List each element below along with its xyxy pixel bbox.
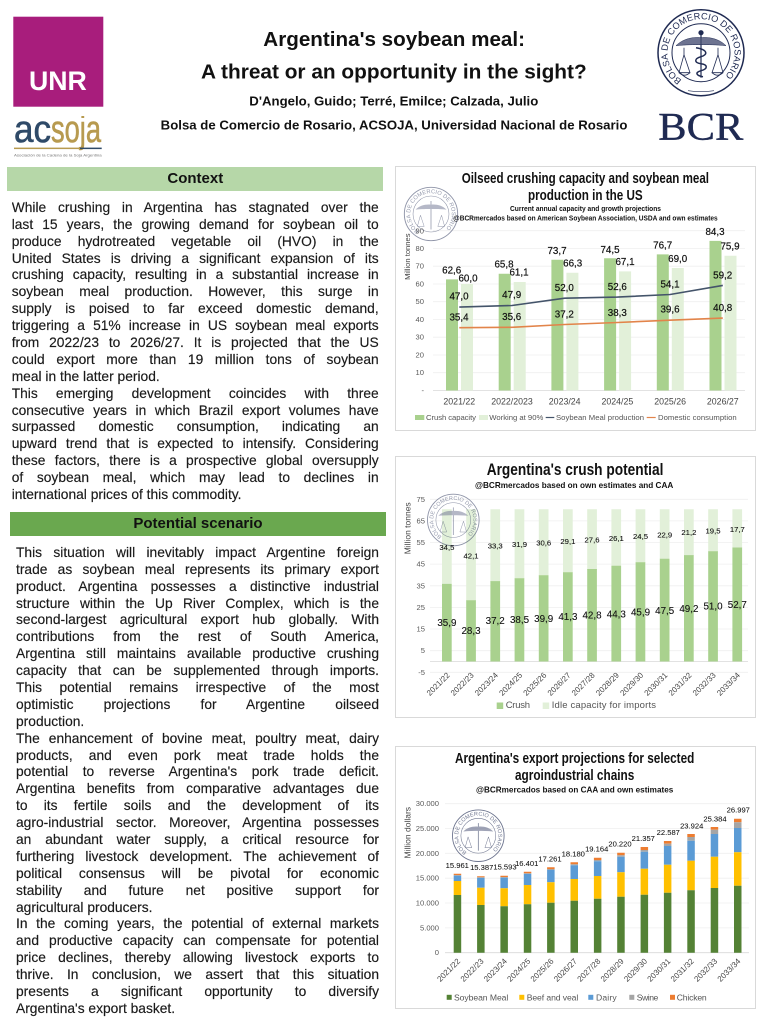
- idle capacity labels: 31,9: [512, 540, 527, 549]
- stacked bars: dairy: [454, 828, 742, 888]
- text: context paragraphs: these factors, there is a prospective global oversupply: [12, 453, 379, 468]
- grid lines and y axis: Million dollars: [403, 807, 413, 858]
- crush labels: 49,2: [679, 604, 698, 615]
- text: potential scenario paragraphs: Argentina benefits from comparative advantages due: [16, 781, 379, 796]
- bars: crush capacity: [446, 241, 722, 390]
- grid lines and y axis: 30: [416, 333, 424, 342]
- legend: Swine: [637, 992, 659, 1002]
- legend: [447, 992, 707, 1002]
- x axis labels: 2027/28: [576, 956, 603, 984]
- legend: Dairy: [596, 992, 617, 1002]
- text: potential scenario paragraphs: production.: [16, 714, 84, 729]
- x axis labels: 2023/24: [473, 670, 500, 698]
- total labels: 26.997: [727, 806, 750, 814]
- text: context paragraphs: [12, 200, 379, 502]
- chart title: @BCRmercados based on CAA and own estimates: [476, 785, 674, 795]
- x axis labels: 2023/24: [549, 397, 581, 407]
- data labels: 69,0: [668, 254, 688, 265]
- text: context paragraphs: meal in the latter period.: [12, 369, 160, 384]
- x axis labels: 2024/25: [601, 397, 633, 407]
- text: context paragraphs: soybean meal production. However, this surge in: [12, 284, 379, 299]
- x axis labels: 2025/26: [654, 397, 686, 407]
- text: potential scenario paragraphs: an abundant water supply, a critical resource for: [16, 832, 379, 847]
- stacked bars: soybean meal: [454, 886, 742, 953]
- legend: Crush: [506, 700, 530, 711]
- crush labels: 41,3: [558, 612, 578, 623]
- data labels: 61,1: [509, 268, 529, 278]
- grid lines and y axis: 30.000: [416, 799, 439, 808]
- text: potential scenario paragraphs: stability and future net positive support for: [16, 883, 379, 898]
- x axis labels: [435, 956, 743, 984]
- idle capacity labels: 22,9: [657, 530, 672, 540]
- affiliations: Bolsa de Comercio de Rosario, ACSOJA, Universidad Nacional de Rosario: [161, 118, 627, 132]
- title and authors: [161, 29, 627, 132]
- crush labels: 44,3: [607, 610, 626, 620]
- text: context paragraphs: surpassed domestic consumption, indicating an: [12, 419, 379, 434]
- idle capacity labels: 26,1: [609, 534, 624, 543]
- text: potential scenario paragraphs: capacity that can be supplemented through imports.: [16, 663, 379, 678]
- stacked bars: chicken: [454, 819, 742, 877]
- chart title: Argentina's crush potential: [487, 461, 663, 479]
- x axis labels: 2028/29: [594, 670, 621, 698]
- text: potential scenario paragraphs: furthering livestock development. The achievement of: [16, 849, 379, 864]
- grid lines and y axis: 55: [417, 538, 425, 547]
- x axis labels: 2021/22: [443, 397, 475, 407]
- text: potential scenario paragraphs: agro-industrial sector. Moreover, Argentina possesses: [16, 815, 379, 830]
- data labels: 66,3: [563, 258, 583, 270]
- x axis labels: 2031/32: [669, 956, 696, 984]
- logo: ACSOJA: [14, 116, 103, 158]
- text: context paragraphs: last 15 years, the growing demand for soybean oil to: [12, 217, 379, 232]
- bars: idle capacity for imports: [442, 509, 742, 601]
- x axis labels: 2024/25: [505, 956, 533, 984]
- grid lines and y axis: -5: [418, 668, 425, 677]
- text: context paragraphs: supply is poised to far exceed domestic demand,: [12, 301, 379, 316]
- x axis labels: 2032/33: [691, 670, 718, 698]
- x axis labels: 2025/26: [529, 956, 556, 984]
- chart title: [453, 170, 718, 222]
- grid lines and y axis: 25.000: [416, 824, 439, 833]
- text: potential scenario paragraphs: price declines, thereby allowing livestock exports to: [16, 950, 379, 965]
- line: soybean meal production: [459, 285, 723, 307]
- text: potential scenario paragraphs: agricultural producers.: [16, 900, 153, 915]
- text: context paragraphs: United States is driving a significant expansion of its: [12, 251, 379, 266]
- logo: UNR: UNR: [29, 66, 87, 96]
- main title line 2: A threat or an opportunity in the sight?: [201, 61, 587, 83]
- x axis labels: 2029/30: [618, 670, 646, 698]
- data labels: 35,4: [449, 312, 469, 324]
- watermark seal: BOLSA DE COMERCIO DE ROSARIO: [430, 496, 478, 539]
- total labels: 15.593: [493, 862, 517, 872]
- chart title: agroindustrial chains: [515, 767, 634, 784]
- data labels: 54,1: [660, 280, 680, 290]
- grid lines and y axis: Million tonnes: [403, 502, 413, 554]
- logo: Bolsa de Comercio de Rosario seal and BCR: [657, 9, 745, 148]
- data labels: 62,6: [442, 266, 462, 276]
- crush labels: 42,8: [582, 610, 602, 622]
- line: domestic consumption: [459, 318, 723, 328]
- x axis labels: 2022/2023: [491, 397, 533, 407]
- data labels: 35,6: [502, 312, 522, 323]
- grid lines and y axis: 45: [417, 560, 425, 569]
- total labels: 20.220: [608, 840, 632, 848]
- chart: Argentina's crush potential: [395, 456, 756, 718]
- logo: Bolsa de Comercio de Rosario seal and BCR: BCR: [658, 106, 743, 148]
- logo: UNR: [13, 16, 104, 107]
- total labels: 15.961: [446, 861, 469, 870]
- text: context paragraphs: consecutive years in which Brazil export volumes have: [12, 403, 379, 418]
- data labels: 67,1: [615, 257, 635, 268]
- text: potential scenario paragraphs: Argentina still maintains available productive crushing: [16, 646, 379, 661]
- stacked bars: swine: [454, 822, 742, 878]
- heading: Potential scenario: Potential scenario: [133, 515, 263, 532]
- data labels: 52,0: [555, 283, 574, 294]
- text: potential scenario paragraphs: political consensus will be pivotal for economic: [16, 866, 379, 881]
- text: potential scenario paragraphs: trade as soybean meal represents its primary export: [16, 562, 379, 577]
- x axis labels: 2030/31: [643, 670, 670, 698]
- grid lines and y axis: -: [421, 386, 424, 395]
- grid lines and y axis: 50: [416, 297, 424, 306]
- chart title: Current annual capacity and growth projections: [510, 204, 661, 213]
- grid lines and y axis: 5: [421, 646, 425, 655]
- total labels: 18.180: [562, 850, 585, 858]
- chart title: @BCRmercados based on own estimates and CAA: [475, 480, 673, 490]
- data labels: 76,7: [653, 240, 672, 252]
- grid lines and y axis: 0: [435, 948, 439, 957]
- data labels: 40,8: [713, 303, 733, 314]
- idle capacity labels: 24,5: [633, 532, 648, 541]
- legend: Soybean Meal: [454, 992, 508, 1002]
- text: potential scenario paragraphs: thrive. In conclusion, we assert that this situation: [16, 967, 379, 982]
- stacked bars: beef and veal: [454, 852, 742, 906]
- idle capacity labels: 34,5: [439, 543, 454, 552]
- idle capacity labels: 17,7: [730, 525, 745, 534]
- grid lines and y axis: 75: [417, 495, 425, 504]
- x axis labels: 2021/22: [425, 670, 452, 698]
- logo: ACSOJA: Asociación de la Cadena de la Soja Argentina: [14, 152, 103, 158]
- legend: Soybean Meal production: [556, 413, 644, 422]
- x axis labels: 2027/28: [570, 670, 597, 698]
- crush labels: 39,9: [534, 614, 553, 625]
- text: potential scenario paragraphs: to its fertile soils and the development of its: [16, 798, 379, 813]
- text: context paragraphs: from 2022/23 to 2026/27. It is projected that the US: [12, 335, 379, 350]
- text: potential scenario paragraphs: [16, 545, 379, 1016]
- watermark seal: BOLSA DE COMERCIO DE ROSARIO: [454, 812, 502, 855]
- chart title: @BCRmercados based on American Soybean Association, USDA and own estimates: [453, 214, 718, 222]
- x axis labels: 2028/29: [599, 956, 626, 984]
- grid lines and y axis: 20: [416, 350, 424, 360]
- legend: Working at 90%: [489, 413, 543, 422]
- heading: Context: Context: [167, 170, 223, 187]
- grid lines and y axis: 15: [417, 624, 425, 634]
- grid lines and y axis: 35: [417, 581, 425, 590]
- grid lines and y axis: 15.000: [416, 874, 439, 883]
- grid lines and y axis: [403, 226, 745, 395]
- total labels: 15.387: [470, 863, 493, 872]
- legend: Crush capacity: [426, 413, 476, 422]
- grid lines and y axis: 70: [416, 262, 424, 271]
- authors: D'Angelo, Guido; Terré, Emilce; Calzada, Julio: [249, 94, 538, 108]
- crush labels: 35,9: [437, 618, 456, 629]
- text: context paragraphs: triggering a 51% increase in US soybean meal exports: [12, 318, 379, 333]
- grid lines and y axis: 10: [416, 368, 424, 377]
- idle capacity labels: [439, 525, 745, 560]
- x axis labels: 2030/31: [646, 956, 673, 984]
- x axis labels: 2026/27: [707, 397, 739, 407]
- crush labels: 51,0: [703, 602, 723, 612]
- data labels: 38,3: [608, 308, 627, 319]
- text: potential scenario paragraphs: In the coming years, the potential of external markets: [16, 916, 379, 931]
- text: context paragraphs: produce hydrotreated vegetable oil (HVO) in the: [12, 234, 379, 249]
- text: potential scenario paragraphs: optimistic projections for Argentine oilseed: [16, 697, 379, 712]
- crush labels: 38,5: [510, 615, 530, 626]
- x axis labels: 2029/30: [622, 956, 649, 984]
- x axis labels: 2024/25: [497, 670, 525, 698]
- x axis labels: 2025/26: [522, 670, 549, 698]
- grid lines and y axis: [403, 799, 749, 957]
- crush labels: 28,3: [461, 626, 481, 637]
- data labels: 60,0: [458, 274, 478, 284]
- data labels: 52,6: [608, 282, 627, 293]
- legend: Idle capacity for imports: [552, 700, 656, 711]
- grid lines and y axis: 20.000: [416, 849, 439, 858]
- grid lines and y axis: 80: [416, 244, 424, 253]
- total labels: 23.924: [680, 822, 703, 830]
- text: potential scenario paragraphs: second-largest agricultural export hub globally. With: [16, 612, 379, 627]
- grid lines and y axis: 40: [416, 315, 424, 324]
- text: potential scenario paragraphs: presents a significant opportunity to diversify: [16, 984, 379, 999]
- total labels: [446, 806, 750, 872]
- x axis labels: 2026/27: [546, 670, 573, 698]
- legend: [497, 700, 656, 711]
- x axis labels: 2023/24: [482, 956, 509, 984]
- legend: [415, 413, 737, 422]
- text: context paragraphs: While crushing in Argentina has stagnated over the: [12, 200, 379, 215]
- idle capacity labels: 33,3: [488, 542, 503, 550]
- text: potential scenario paragraphs: Argentina's export basket.: [16, 1001, 175, 1016]
- text: potential scenario paragraphs: contributions from the rest of South America,: [16, 629, 379, 644]
- text: context paragraphs: This emerging development coincides with three: [12, 386, 379, 401]
- x axis labels: 2022/23: [449, 670, 476, 698]
- data labels: 37,2: [555, 310, 574, 320]
- total labels: 17.261: [538, 854, 562, 864]
- x axis labels: 2031/32: [667, 670, 694, 698]
- watermark seal: BOLSA DE COMERCIO DE ROSARIO: [406, 189, 456, 234]
- legend: Beef and veal: [527, 992, 578, 1002]
- data labels: 47,9: [502, 290, 521, 301]
- grid lines and y axis: [403, 495, 748, 677]
- x axis labels: 2022/23: [459, 956, 486, 984]
- crush labels: 47,5: [655, 606, 675, 617]
- crush labels: 52,7: [728, 600, 747, 611]
- data labels: 47,0: [449, 292, 469, 302]
- data labels: 39,6: [660, 304, 680, 316]
- x axis labels: 2021/22: [435, 956, 463, 984]
- legend: Domestic consumption: [658, 413, 737, 422]
- text: context paragraphs: upward trend that is expected to intensify. Considering: [12, 436, 379, 451]
- grid lines and y axis: 10.000: [416, 898, 439, 908]
- chart: oilseed crushing capacity and soybean meal production in the US: [395, 166, 756, 431]
- bars: working at 90%: [461, 256, 736, 390]
- x axis labels: 2033/34: [715, 670, 742, 698]
- data labels: [442, 227, 740, 324]
- data labels: 65,8: [494, 260, 514, 270]
- data labels: 59,2: [713, 270, 732, 282]
- x axis labels: [425, 670, 742, 698]
- heading: Context: [7, 167, 383, 191]
- text: context paragraphs: international prices of this commodity.: [12, 487, 241, 502]
- chart title: [455, 750, 694, 795]
- text: potential scenario paragraphs: This potential remains irrespective of the most: [16, 680, 379, 695]
- chart title: production in the US: [528, 187, 643, 204]
- total labels: 22.587: [657, 828, 680, 837]
- text: context paragraphs: crushing capacity, resulting in a substantial increase in: [12, 267, 379, 282]
- text: potential scenario paragraphs: products, and even pork meat trade holds the: [16, 748, 379, 763]
- grid lines and y axis: 65: [417, 516, 425, 525]
- text: potential scenario paragraphs: This situation will inevitably impact Argentine foreign: [16, 545, 379, 560]
- idle capacity labels: 19,5: [706, 526, 720, 536]
- idle capacity labels: 29,1: [560, 537, 575, 546]
- chart title: [475, 461, 673, 490]
- heading: Potential scenario: [10, 512, 386, 536]
- text: context paragraphs: could export more than 19 million tons of soybean: [12, 352, 379, 367]
- crush labels: 45,9: [631, 608, 650, 618]
- text: potential scenario paragraphs: potential to reverse Argentina's pork trade deficit.: [16, 764, 379, 779]
- x axis labels: 2026/27: [552, 956, 579, 984]
- idle capacity labels: 27,6: [585, 536, 599, 544]
- text: potential scenario paragraphs: The enhancement of bovine meat, poultry meat, dairy: [16, 731, 379, 746]
- data labels: 84,3: [705, 227, 725, 238]
- total labels: 21.357: [632, 834, 655, 843]
- grid lines and y axis: Million tonnes: [403, 233, 412, 280]
- x axis labels: 2033/34: [716, 956, 743, 984]
- text: potential scenario paragraphs: structure within the Up River Complex, which is the: [16, 596, 379, 611]
- data labels: 75,9: [720, 242, 740, 252]
- grid lines and y axis: 5.000: [420, 923, 439, 932]
- x axis labels: [443, 397, 739, 407]
- legend: Chicken: [677, 992, 707, 1002]
- chart: Argentina's export projections for selected agroindustrial chains: [395, 746, 756, 1009]
- crush labels: 37,2: [486, 616, 505, 627]
- crush labels: [437, 600, 747, 637]
- total labels: 19.164: [585, 844, 608, 854]
- bars: crush: [442, 548, 742, 662]
- text: potential scenario paragraphs: and productive capacity can compensate for potential: [16, 933, 379, 948]
- idle capacity labels: 30,6: [536, 538, 551, 548]
- grid lines and y axis: 25: [417, 603, 425, 612]
- idle capacity labels: 21,2: [681, 528, 696, 537]
- main title line 1: Argentina's soybean meal:: [263, 29, 525, 51]
- data labels: 73,7: [547, 246, 567, 257]
- logo: Bolsa de Comercio de Rosario seal and BCR: BOLSA DE COMERCIO DE ROSARIO: [661, 12, 741, 85]
- grid lines and y axis: 60: [416, 280, 424, 288]
- chart title: Argentina's export projections for selected: [455, 750, 694, 767]
- grid lines and y axis: 90: [416, 226, 424, 236]
- data labels: 74,5: [600, 245, 620, 256]
- text: potential scenario paragraphs: product. Argentina possesses a distinctive industrial: [16, 579, 379, 594]
- text: context paragraphs: of soybean meal, which may lead to declines in: [12, 470, 379, 485]
- total labels: 25.384: [703, 814, 727, 824]
- total labels: 16.401: [515, 859, 538, 868]
- x axis labels: 2032/33: [692, 956, 720, 984]
- idle capacity labels: 42,1: [464, 552, 478, 560]
